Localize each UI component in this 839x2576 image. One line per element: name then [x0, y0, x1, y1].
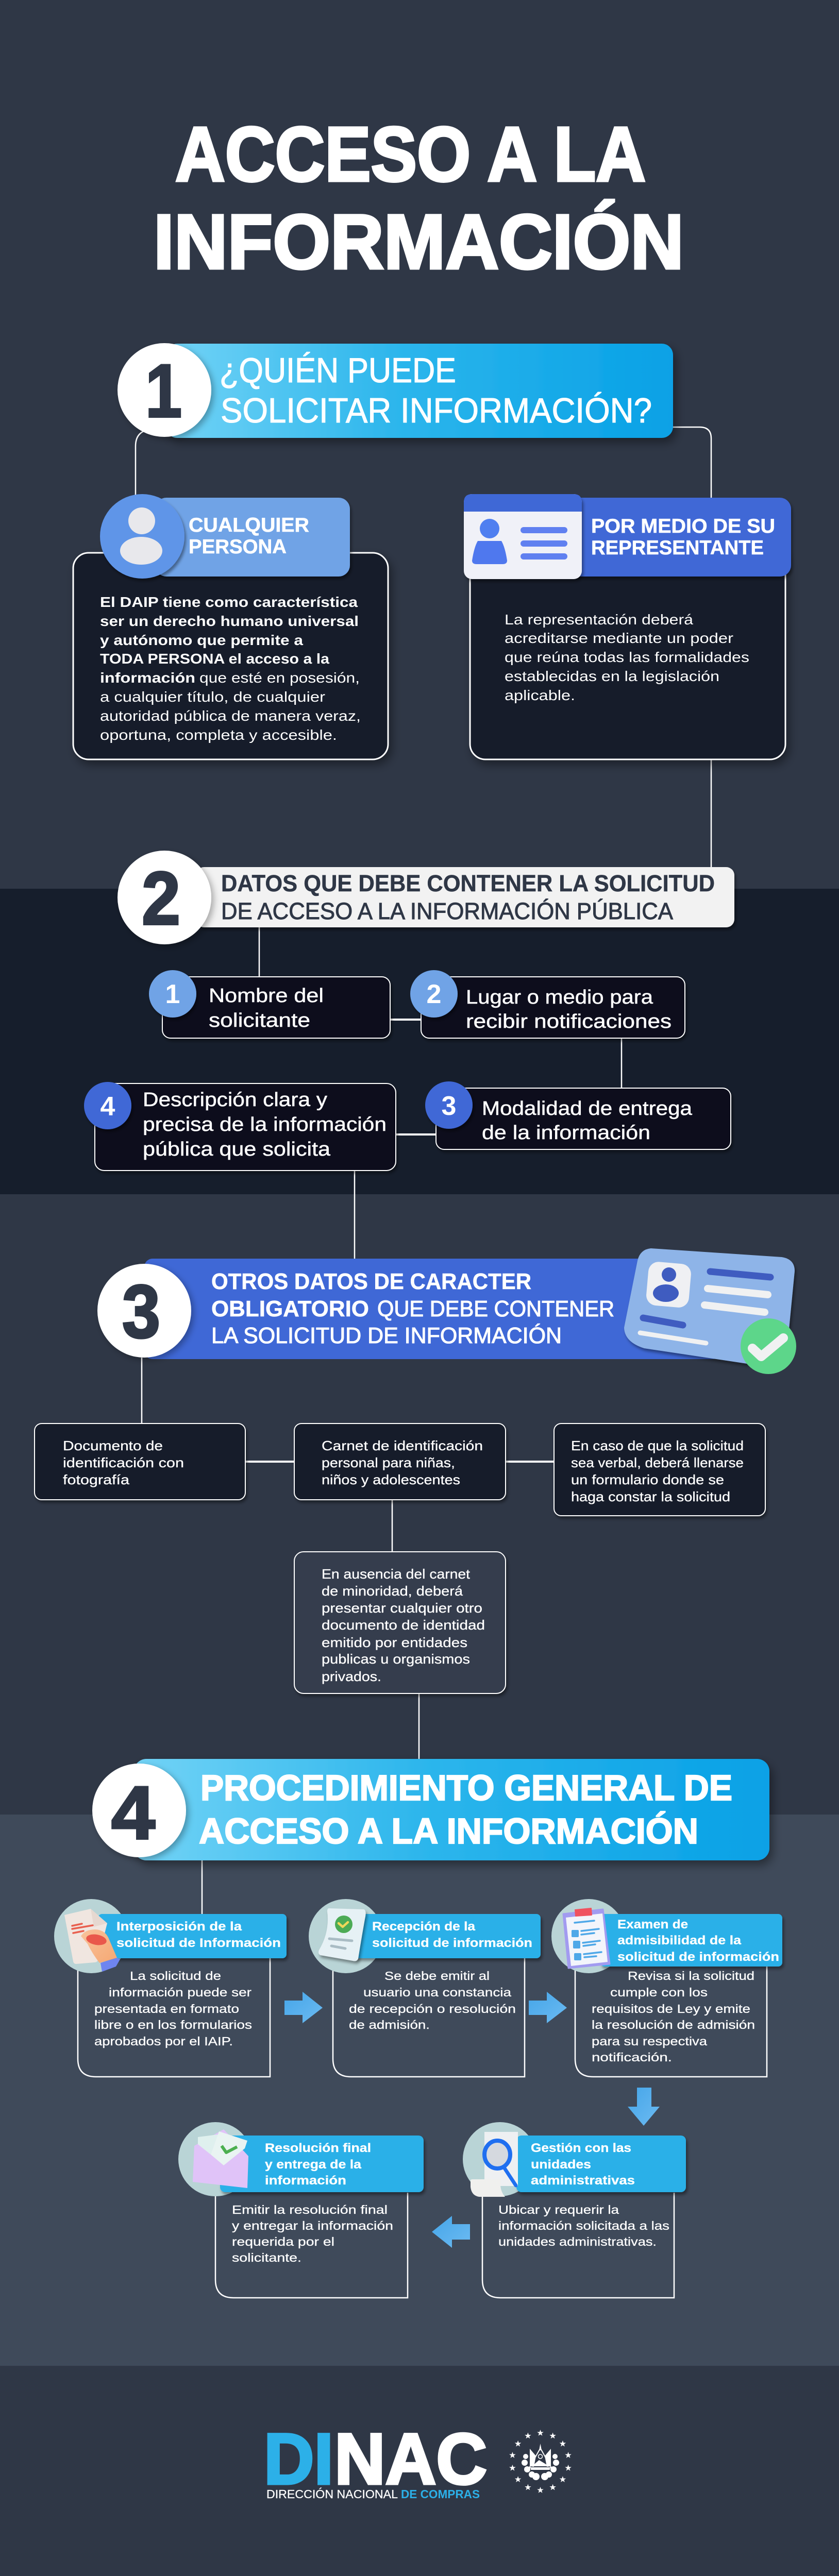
icon: magnifier on scroll: [471, 2132, 518, 2197]
box: ausencia del carnet: documento de identidad: [322, 1617, 485, 1633]
label text: unidades: [531, 2158, 591, 2172]
section 1 heading: [220, 351, 652, 430]
card text: establecidas en la legislación: [505, 668, 719, 684]
label text: Interposición de la: [116, 1920, 242, 1934]
section 2 number badge: 2: [142, 856, 180, 940]
icon backdrop: [54, 1899, 128, 1973]
section 3 heading: OBLIGATORIO: [211, 1296, 369, 1321]
icon: envelope with check: [193, 2129, 248, 2188]
step outline: [215, 2193, 408, 2298]
box: ausencia del carnet: En ausencia del carnet: [322, 1566, 471, 1582]
step label: [98, 1914, 287, 1958]
icon: national emblem with stars: [509, 2430, 572, 2493]
item 2: lugar o medio: [410, 970, 685, 1038]
badge 4: [84, 1082, 131, 1129]
badge 2: 2: [427, 979, 441, 1009]
step 1: interposición: [54, 1899, 287, 2077]
icon: hand stamping document: [64, 1909, 120, 1972]
panel: por medio de su representante: [464, 494, 791, 759]
step label: [600, 1914, 782, 1967]
box: ausencia del carnet: emitido por entidades: [322, 1635, 467, 1650]
label text: POR MEDIO DE SU: [591, 515, 775, 537]
title: INFORMACIÓN: [154, 198, 684, 285]
connector: section 1 to cards and section 2: [136, 427, 711, 871]
item text: [482, 1098, 693, 1144]
label text: Examen de: [617, 1918, 688, 1931]
arrow: step 4 to step 5: [432, 2216, 470, 2248]
step text: requerida por el: [232, 2235, 334, 2248]
card text: [505, 612, 749, 703]
section 3 header: [97, 1248, 796, 1374]
box: solicitud verbal: sea verbal, deberá llenarse: [571, 1455, 744, 1470]
step text: información puede ser: [109, 1986, 251, 1999]
box: ausencia del carnet: privados.: [322, 1669, 381, 1684]
section 1 number badge: [118, 343, 211, 437]
section 2 heading: DATOS QUE DEBE CONTENER LA SOLICITUD: [221, 870, 715, 896]
card text: El DAIP tiene como característica: [100, 594, 358, 610]
item text: Nombre del: [209, 985, 324, 1007]
step label: [220, 2136, 424, 2192]
card text: acreditarse mediante un poder: [505, 630, 733, 646]
box: documento de identificación: fotografía: [63, 1472, 130, 1487]
label text: [372, 1920, 532, 1950]
step outline: [482, 2193, 674, 2298]
section 2 heading: DE ACCESO A LA INFORMACIÓN PÚBLICA: [221, 898, 673, 924]
background band: section 2: [0, 889, 839, 1194]
box: carnet de identificación: Carnet de identificación: [322, 1438, 483, 1453]
label text: solicitud de información: [617, 1950, 779, 1964]
step text: y entregar la información: [232, 2219, 393, 2232]
step 3: examen: [551, 1899, 782, 2077]
icon: clipboard: [563, 1908, 610, 1968]
box: solicitud verbal: un formulario donde se: [571, 1472, 724, 1487]
item 3: modalidad de entrega: [425, 1081, 731, 1149]
card label: [567, 498, 791, 577]
section 2 heading: [221, 870, 715, 924]
step text: información solicitada a las: [498, 2219, 669, 2232]
section 4 banner: [134, 1759, 769, 1860]
card text: ser un derecho humano universal: [100, 613, 359, 629]
label text: [265, 2141, 371, 2188]
section 4 number badge: [92, 1764, 186, 1857]
box: solicitud verbal: En caso de que la solicitud: [571, 1438, 744, 1453]
arrow: step 1 to step 2: [284, 1992, 323, 2023]
step outline: [575, 1967, 767, 2077]
title: [154, 111, 684, 285]
step 5: resolución final: [178, 2122, 424, 2298]
step text: cumple con los: [610, 1986, 708, 1999]
box: ausencia del carnet: [294, 1552, 506, 1693]
box: documento de identificación: [35, 1423, 245, 1500]
item 1: nombre del solicitante: [149, 970, 390, 1038]
connectors: section 3: [142, 1358, 554, 1759]
card text: autoridad pública de manera veraz,: [100, 708, 361, 724]
item text: Modalidad de entrega: [482, 1098, 693, 1120]
step text: la resolución de admisión: [592, 2018, 755, 2031]
step outline: [333, 1958, 525, 2077]
section 1 number badge: 1: [145, 349, 182, 433]
icon backdrop: [551, 1899, 626, 1973]
card body: [470, 546, 785, 759]
label text: Recepción de la: [372, 1920, 476, 1934]
footer logo: DINAC: NAC: [334, 2418, 487, 2499]
icon: id card with check: [624, 1248, 796, 1374]
label text: solicitud de Información: [116, 1936, 281, 1950]
card text: que esté en posesión,: [199, 670, 360, 686]
box: carnet de identificación: personal para niñas,: [322, 1455, 455, 1470]
item text: [209, 985, 324, 1031]
label text: [591, 515, 775, 559]
section 1 heading: SOLICITAR INFORMACIÓN?: [221, 391, 652, 430]
section 3 banner: [144, 1259, 721, 1359]
box: carnet de identificación: [294, 1423, 506, 1500]
connector: section 4: [202, 1860, 203, 1914]
step text: notificación.: [592, 2050, 672, 2064]
section 4 header: [92, 1759, 769, 1860]
footer logo: DINAC: DE COMPRAS: [401, 2487, 480, 2501]
box: documento de identificación: identificación con: [63, 1455, 184, 1470]
step text: Ubicar y requerir la: [498, 2203, 619, 2216]
step 2: recepción: [309, 1899, 541, 2077]
arrow: step 2 to step 3: [529, 1992, 567, 2023]
section 4 heading: PROCEDIMIENTO GENERAL DE: [200, 1768, 732, 1808]
connectors: section 2: [259, 927, 622, 1259]
badge 1: [149, 970, 196, 1018]
card text: oportuna, completa y accesible.: [100, 727, 337, 743]
card text: TODA PERSONA el acceso a la: [100, 651, 330, 667]
title: ACCESO A LA: [175, 111, 646, 197]
footer logo: DINAC: [264, 2418, 487, 2501]
section 3 heading: QUE DEBE CONTENER: [377, 1296, 614, 1321]
icon: person: [100, 494, 184, 579]
card label: [155, 498, 350, 577]
icon backdrop: [309, 1899, 383, 1973]
section 1 heading: ¿QUIÉN PUEDE: [220, 351, 456, 390]
section 1 banner: [166, 344, 673, 438]
step text: aprobados por el IAIP.: [94, 2035, 233, 2048]
item 4: descripción clara: [84, 1082, 396, 1171]
card text: La representación deberá: [505, 612, 694, 628]
section 2 number badge: [118, 851, 211, 944]
card text: [100, 594, 361, 743]
step text: [349, 1969, 516, 2031]
icon: approved document: [318, 1908, 366, 1961]
step text: Se debe emitir al: [384, 1969, 490, 1982]
box: solicitud verbal: [554, 1423, 765, 1516]
icon backdrop: [463, 2122, 537, 2196]
item text: [466, 987, 672, 1032]
card text: que reúna todas las formalidades: [505, 649, 749, 665]
item text: precisa de la información: [143, 1114, 387, 1136]
label text: REPRESENTANTE: [591, 537, 764, 559]
badge 4: 4: [100, 1092, 115, 1122]
footer logo: DINAC: DIRECCIÓN NACIONAL: [266, 2487, 398, 2501]
section 3 number badge: 3: [122, 1269, 160, 1353]
card text: a cualquier título, de cualquier: [100, 689, 325, 705]
step text: de admisión.: [349, 2018, 430, 2031]
label text: admisibilidad de la: [617, 1934, 742, 1947]
item text: de la información: [482, 1122, 650, 1144]
label text: administrativas: [531, 2174, 635, 2188]
item text: Descripción clara y: [143, 1089, 327, 1111]
step text: solicitante.: [232, 2251, 301, 2264]
label text: [116, 1920, 281, 1950]
section 4 heading: ACCESO A LA INFORMACIÓN: [199, 1811, 698, 1851]
label text: [189, 514, 309, 558]
box: carnet de identificación: niños y adolescentes: [322, 1472, 460, 1487]
background band: section 4: [0, 1815, 839, 2366]
label text: información: [265, 2174, 346, 2188]
section 1 header: [118, 343, 673, 438]
step 4: gestión: [463, 2122, 686, 2298]
section 3 heading: OTROS DATOS DE CARACTER: [211, 1269, 531, 1294]
item text: [143, 1089, 387, 1160]
step label: [516, 2136, 686, 2192]
label text: Resolución final: [265, 2141, 371, 2155]
section 3 number badge: [97, 1264, 191, 1358]
step text: libre o en los formularios: [94, 2018, 252, 2031]
box: ausencia del carnet: publicas u organismos: [322, 1651, 470, 1667]
step text: usuario una constancia: [363, 1986, 512, 1999]
icon backdrop: [178, 2122, 253, 2196]
step text: La solicitud de: [130, 1969, 221, 1982]
item text: Lugar o medio para: [466, 987, 653, 1008]
box: ausencia del carnet: presentar cualquier otro: [322, 1600, 482, 1616]
step text: [498, 2203, 669, 2248]
label text: [617, 1918, 779, 1964]
box: documento de identificación: Documento de: [63, 1438, 163, 1453]
step text: requisitos de Ley y emite: [592, 2002, 750, 2015]
step text: unidades administrativas.: [498, 2235, 657, 2248]
arrow: step 3 to step 4: [628, 2088, 660, 2126]
item text: solicitante: [209, 1010, 310, 1031]
step text: [232, 2203, 393, 2264]
card text: aplicable.: [505, 687, 575, 703]
icon: id card: [464, 494, 582, 579]
step text: [94, 1969, 252, 2048]
badge 1: 1: [165, 979, 180, 1009]
step outline: [78, 1958, 270, 2077]
card body: [73, 553, 388, 759]
card text: y autónomo que permite a: [100, 632, 304, 648]
panel: cualquier persona: [73, 494, 388, 759]
footer logo: DINAC: DI: [264, 2418, 333, 2499]
box: ausencia del carnet: de minoridad, deberá: [322, 1583, 463, 1599]
section 4 heading: [199, 1768, 732, 1851]
label text: Gestión con las: [531, 2141, 631, 2155]
section 4 number badge: 4: [111, 1771, 155, 1855]
label text: y entrega de la: [265, 2158, 362, 2172]
step text: [592, 1969, 755, 2064]
item text: pública que solicita: [143, 1139, 331, 1160]
step text: presentada en formato: [94, 2002, 239, 2015]
section 2 header: [118, 851, 734, 944]
item text: recibir notificaciones: [466, 1011, 672, 1032]
label text: CUALQUIER: [189, 514, 309, 536]
label text: solicitud de información: [372, 1936, 532, 1950]
section 3 heading: [211, 1269, 614, 1348]
badge 3: [425, 1081, 473, 1129]
section 2 banner: [196, 867, 734, 927]
card text: información: [100, 670, 195, 686]
badge 3: 3: [442, 1091, 456, 1121]
step text: Revisa si la solicitud: [628, 1969, 754, 1982]
step text: de recepción o resolución: [349, 2002, 516, 2015]
step text: Emitir la resolución final: [232, 2203, 388, 2216]
step text: para su respectiva: [592, 2035, 708, 2048]
box: solicitud verbal: haga constar la solicitud: [571, 1489, 730, 1504]
badge 2: [410, 970, 458, 1018]
label text: PERSONA: [189, 536, 287, 558]
section 3 heading: LA SOLICITUD DE INFORMACIÓN: [211, 1323, 562, 1348]
step label: [353, 1914, 541, 1958]
label text: [531, 2141, 635, 2188]
